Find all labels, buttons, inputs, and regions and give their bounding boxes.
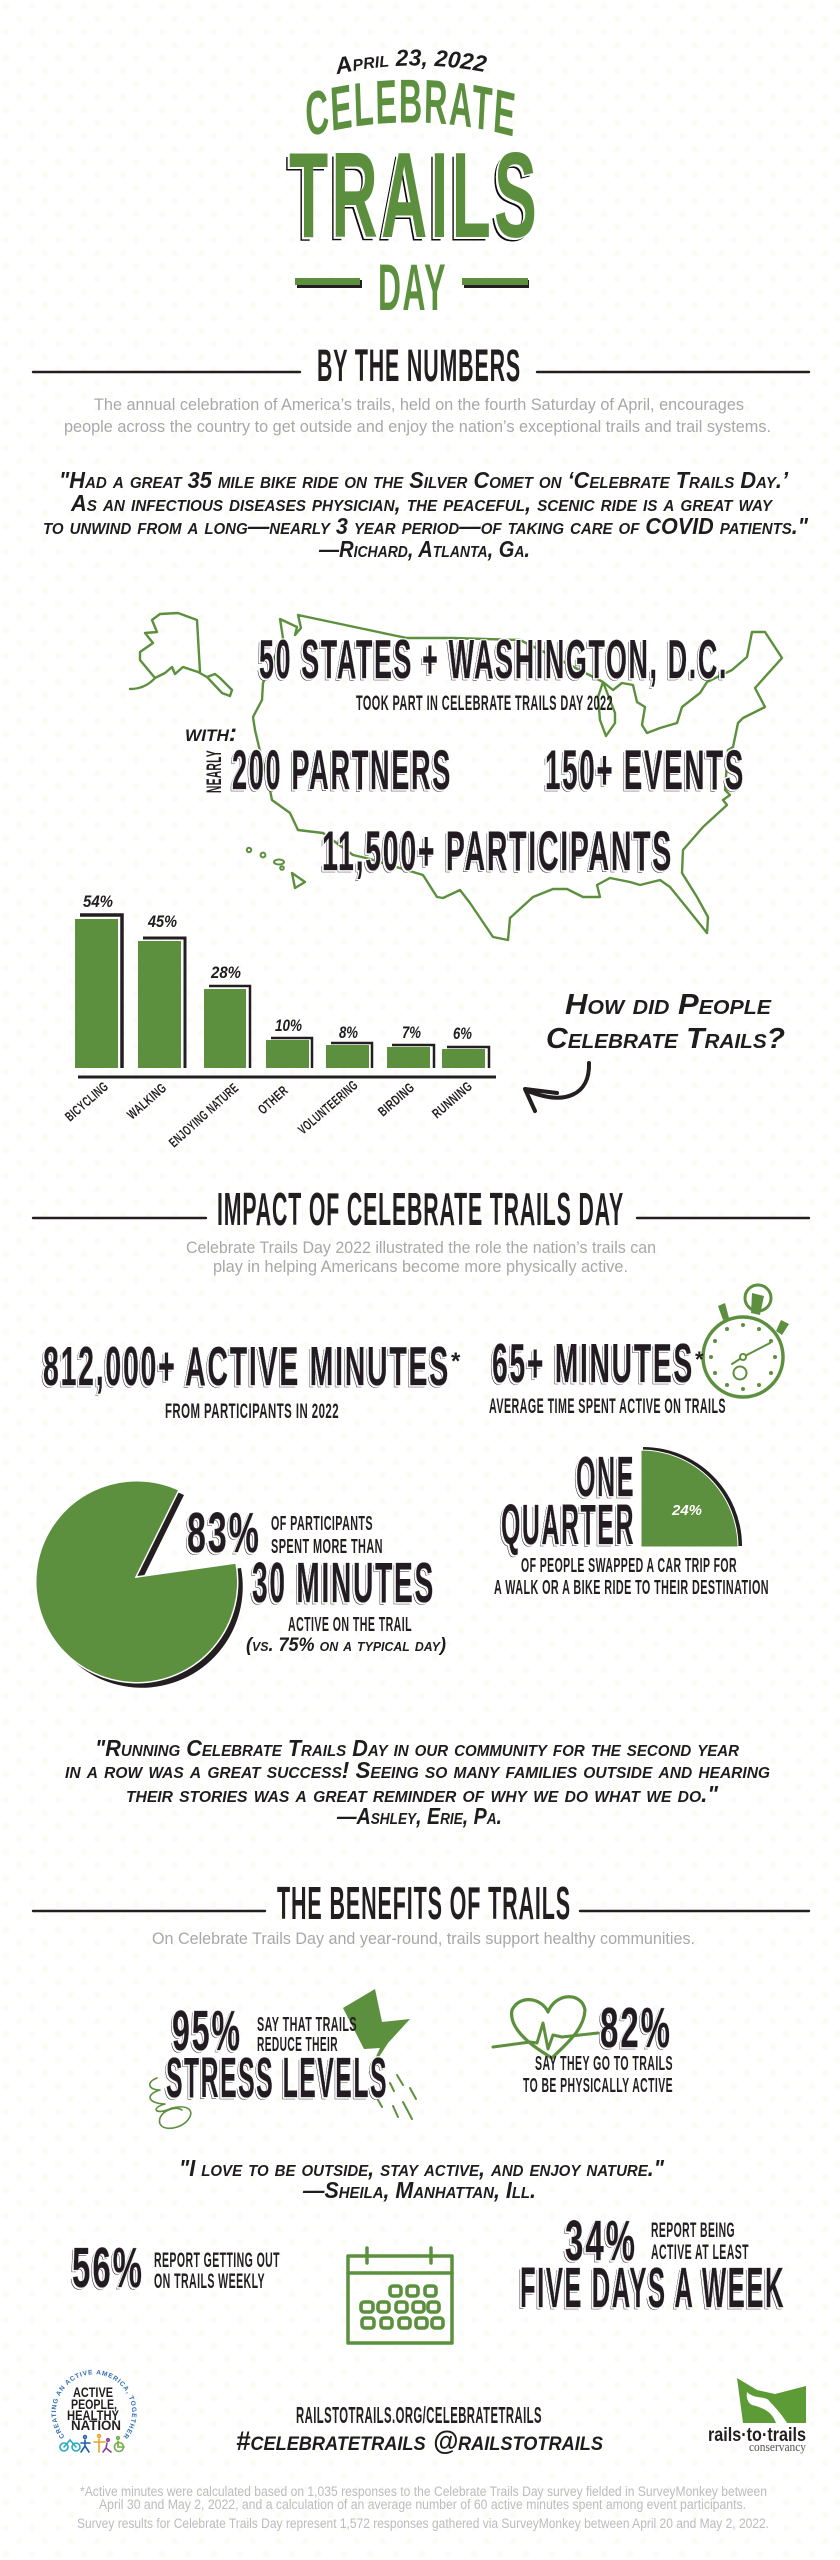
bar: other 10%: OTHER	[255, 1083, 291, 1117]
stat: 82% physically active: SAY THEY GO TO TRAILS	[535, 2053, 673, 2075]
quote: Sheila	[179, 2155, 665, 2203]
stat: 83% spent more than 30 minutes: (vs. 75% on a typical day)	[246, 1635, 446, 1656]
quote: Ashley: —Ashley, Erie, Pa.	[336, 1803, 502, 1829]
date: April 23, 2022	[336, 49, 487, 74]
icon: scribble	[150, 2078, 191, 2128]
bar: running 6%	[429, 1024, 489, 1121]
stat: 50 states: TOOK PART IN CELEBRATE TRAILS DAY 2022	[356, 692, 613, 715]
text: 200 PARTNERS	[232, 738, 452, 801]
stat: 95% reduce stress levels: 95%	[172, 1999, 242, 2063]
title: Celebrate Trails Day	[286, 49, 540, 324]
bar: running 6%: 6%	[453, 1024, 472, 1043]
chart axis	[78, 1076, 496, 1078]
stat: 95% reduce stress levels	[166, 1999, 388, 2110]
quote: Richard: As an infectious diseases physician, the peaceful, scenic ride is a great way	[70, 490, 773, 516]
callout: how did people celebrate trails: Celebrate Trails?	[546, 1023, 785, 1055]
quote: Ashley: "Running Celebrate Trails Day in our community for the second year	[95, 1735, 739, 1761]
stat: 83% spent more than 30 minutes: SPENT MORE THAN	[271, 1536, 383, 1558]
benefits intro text: On Celebrate Trails Day and year-round, trails support healthy communities.	[152, 1930, 695, 1948]
bar: volunteering 8%: 8%	[339, 1023, 358, 1042]
stat: 50 states	[259, 628, 728, 715]
arrow	[525, 1063, 589, 1111]
bar: birding 7%: 7%	[402, 1023, 421, 1042]
stat: 82% physically active: TO BE PHYSICALLY ACTIVE	[523, 2075, 673, 2097]
logo: Active People, Healthy Nation: HEALTHY	[67, 2408, 119, 2423]
bar: volunteering 8%	[295, 1023, 372, 1137]
stat: 56% weekly: ON TRAILS WEEKLY	[154, 2270, 265, 2293]
icon: calendar	[348, 2248, 452, 2343]
bar chart: how people celebrated	[62, 892, 496, 1150]
quote: Richard: —Richard, Atlanta, Ga.	[318, 536, 530, 562]
bar: enjoying nature 28%	[166, 963, 250, 1150]
logo: Rails-to-Trails Conservancy: rails·to·trails	[708, 2425, 806, 2446]
pie chart: 83%	[36, 1481, 243, 1688]
title word: Celebrate: CELEBRATE	[306, 80, 515, 136]
intro text	[64, 396, 771, 436]
footnotes: April 30 and May 2, 2022, and a calculation of an average number of 60 active minutes spent among event participants.	[99, 2497, 746, 2512]
bar: enjoying nature 28%: 28%	[210, 963, 241, 982]
pie chart: quarter 24%	[641, 1447, 742, 1547]
links: website and hashtags: #celebratetrails @railstotrails	[236, 2426, 603, 2456]
footnotes	[77, 2484, 769, 2531]
bar: other 10%	[255, 1016, 312, 1117]
bar: bicycling 54%	[62, 892, 122, 1124]
stat: 83% spent more than 30 minutes: ACTIVE ON THE TRAIL	[288, 1614, 412, 1636]
stat: 65+ minutes	[489, 1332, 726, 1418]
stat: 83% spent more than 30 minutes: 30 MINUTES	[252, 1551, 435, 1615]
stat: one quarter: QUARTER	[501, 1493, 635, 1557]
impact intro text	[186, 1239, 656, 1276]
logo: Active People, Healthy Nation: PEOPLE,	[71, 2397, 117, 2412]
stat: 812,000+ active minutes: FROM PARTICIPANTS IN 2022	[165, 1400, 339, 1423]
quote: Ashley: their stories was a great reminder of why we do what we do."	[126, 1781, 719, 1807]
bar: other 10%: 10%	[275, 1016, 302, 1035]
quote: Ashley: in a row was a great success! Seeing so many families outside and hearing	[65, 1757, 770, 1783]
logo: Rails-to-Trails Conservancy: conservancy	[749, 2439, 806, 2454]
quote: Richard	[43, 467, 809, 562]
logo: Active People, Healthy Nation: ACTIVE	[73, 2385, 113, 2400]
stat: 56% weekly	[72, 2236, 280, 2300]
quote: Richard: to unwind from a long—nearly 3 year period—of taking care of COVID patients."	[43, 513, 809, 539]
stat: 34% five days a week: 34%	[565, 2209, 637, 2273]
impact intro text: Celebrate Trails Day 2022 illustrated the role the nation’s trails can	[186, 1239, 656, 1257]
stat: 82% physically active	[523, 1996, 673, 2097]
stat: 812,000+ active minutes: 812,000+ ACTIVE MINUTES	[43, 1335, 450, 1397]
icon: lightning bolt	[343, 1989, 416, 2119]
impact intro text: play in helping Americans become more physically active.	[213, 1258, 628, 1276]
title word: Trails: TRAILS	[289, 127, 540, 263]
stat: 812,000+ active minutes	[43, 1335, 461, 1423]
logo: Rails-to-Trails Conservancy	[708, 2378, 806, 2454]
icon: stopwatch	[703, 1285, 789, 1397]
map of United States	[130, 613, 782, 940]
stat: one quarter: ONE	[576, 1445, 635, 1509]
bar: birding 7%	[375, 1023, 434, 1119]
stat: 95% reduce stress levels: SAY THAT TRAILS	[257, 2014, 357, 2036]
logo: Active People, Healthy Nation: CREATING AN ACTIVE AMERICA, TOGETHER	[51, 2370, 137, 2439]
intro text: The annual celebration of America’s trails, held on the fourth Saturday of April, encourages	[94, 396, 744, 414]
quote: Sheila: "I love to be outside, stay active, and enjoy nature."	[179, 2155, 665, 2181]
text: STRESS LEVELS	[166, 2046, 388, 2110]
intro text: people across the country to get outside and enjoy the nation’s exceptional trails and trail systems.	[64, 418, 771, 436]
bar: birding 7%: BIRDING	[375, 1080, 417, 1119]
bar: bicycling 54%: 54%	[83, 892, 113, 911]
quote: Ashley	[65, 1735, 770, 1829]
stat: 34% five days a week	[520, 2209, 785, 2320]
stat: 82% physically active: 82%	[600, 1996, 672, 2060]
stat: 65+ minutes: *	[695, 1347, 704, 1372]
stat: 95% reduce stress levels: REDUCE THEIR	[257, 2034, 338, 2056]
stat: 56% weekly: 56%	[72, 2236, 144, 2300]
bar: walking 45%	[124, 912, 185, 1122]
stat: 83% spent more than 30 minutes: OF PARTICIPANTS	[271, 1513, 373, 1535]
bar: enjoying nature 28%: ENJOYING NATURE	[166, 1080, 241, 1150]
callout: how did people celebrate trails	[546, 989, 785, 1055]
stat: 56% weekly: REPORT GETTING OUT	[154, 2249, 280, 2272]
title side bar left	[295, 278, 362, 288]
stat: one quarter	[494, 1445, 769, 1599]
stat: 34% five days a week: REPORT BEING	[651, 2219, 735, 2242]
title side bar right	[462, 278, 529, 288]
heading: By the numbers: BY THE NUMBERS	[317, 340, 521, 391]
bar: running 6%: RUNNING	[429, 1078, 475, 1121]
title: Celebrate Trails Day: DAY	[378, 250, 447, 324]
pie chart: quarter 24%: 24%	[671, 1502, 702, 1519]
map: lower 48	[253, 615, 782, 940]
map: Alaska	[130, 613, 232, 696]
quote: Sheila: —Sheila, Manhattan, Ill.	[302, 2177, 536, 2203]
bar: volunteering 8%: VOLUNTEERING	[295, 1077, 361, 1137]
links: website and hashtags: RAILSTOTRAILS.ORG/CELEBRATETRAILS	[296, 2402, 542, 2428]
stat: 83% spent more than 30 minutes: 83%	[187, 1501, 261, 1565]
logo: Active People, Healthy Nation: NATION	[71, 2418, 121, 2433]
footnotes: Survey results for Celebrate Trails Day represent 1,572 responses gathered via SurveyMonkey between April 20 and May 2, 2022.	[77, 2516, 769, 2531]
footnotes: *Active minutes were calculated based on 1,035 responses to the Celebrate Trails Day survey fielded in SurveyMonkey between	[80, 2484, 767, 2499]
stat: 83% spent more than 30 minutes	[187, 1501, 446, 1656]
map: Hawaii	[247, 848, 305, 888]
label: with: with:	[185, 720, 237, 747]
stat: nearly 200 partners	[203, 738, 452, 801]
bar: walking 45%: 45%	[147, 912, 177, 931]
bar: walking 45%: WALKING	[124, 1080, 169, 1122]
quote: Richard: "Had a great 35 mile bike ride on the Silver Comet on ‘Celebrate Trails Day.’	[59, 467, 789, 493]
links: website and hashtags	[236, 2402, 603, 2456]
stat: nearly 200 partners: NEARLY	[203, 750, 226, 793]
callout: how did people celebrate trails: How did People	[565, 989, 772, 1021]
icon: heart with pulse	[493, 1997, 598, 2058]
stat: 812,000+ active minutes: *	[451, 1348, 461, 1375]
bar: bicycling 54%: BICYCLING	[62, 1079, 111, 1124]
